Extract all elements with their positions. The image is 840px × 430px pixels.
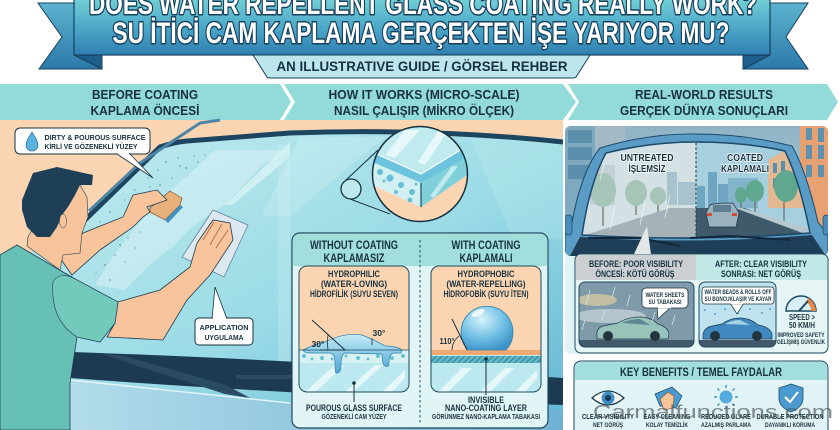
icon: cleaning hand [655, 387, 682, 410]
box: hydrophobic: HİDROFOBİK (SUYU İTEN) [444, 289, 529, 299]
icon: shield [779, 384, 803, 412]
image: car with water beading [699, 282, 776, 347]
section header: real-world results: REAL-WORLD RESULTS [635, 87, 773, 102]
callout: application [195, 287, 253, 345]
shirt [0, 245, 118, 430]
cowl and wiper [70, 352, 563, 405]
section header: how it works: NASIL ÇALIŞIR (MİKRO ÖLÇEK) [334, 103, 514, 118]
benefit: clear visibility: CLEAR VISIBILITY [582, 412, 634, 421]
city: coated side [697, 172, 758, 208]
heading: with coating: KAPLAMALI [460, 253, 512, 265]
benefit: durable protection: DAYANIKLI KORUMA [765, 422, 815, 429]
panel: real-world results [565, 126, 829, 354]
section header: before coating: BEFORE COATING [92, 87, 198, 102]
section header: how it works: HOW IT WORKS (MICRO-SCALE) [328, 87, 520, 102]
section header: before coating [0, 84, 291, 120]
water bead [461, 306, 513, 350]
text: before [589, 259, 683, 280]
windshield outline [582, 142, 810, 238]
comparison header band [293, 234, 547, 266]
A-pillar and top frame [85, 132, 563, 220]
text: speed and safety: SPEED > [789, 313, 815, 322]
label: coated [721, 153, 769, 175]
box: hydrophobic: HYDROPHOBIC [458, 269, 515, 280]
wall background [0, 120, 563, 430]
bubble: water sheets [642, 288, 688, 319]
before and after panel [574, 226, 828, 353]
scene: street through windshield [565, 126, 829, 256]
box: hydrophilic: (WATER-LOVING) [321, 279, 387, 290]
text: speed and safety: IMPROVED SAFETY [778, 332, 825, 339]
panel: windshield scene [0, 120, 563, 430]
porous layer [370, 161, 421, 207]
watermark: Carmalfunctions.com [593, 402, 833, 422]
label: nano-coating layer: GÖRÜNMEZ NANO-KAPLAMA TABAKASI [432, 412, 540, 421]
box: hydrophilic: HİDROFİLİK (SUYU SEVEN) [310, 289, 398, 299]
water film with drips [303, 334, 402, 373]
box: hydrophobic [431, 266, 541, 392]
top glass face [378, 127, 460, 174]
ear [60, 214, 66, 228]
bubble: water sheets: SU TABAKASI [648, 299, 682, 306]
section header: before coating: KAPLAMA ÖNCESİ [90, 103, 200, 118]
benefit: clear visibility [582, 412, 634, 429]
benefit: clear visibility: NET GÖRÜŞ [593, 420, 624, 429]
icon: speedometer [786, 296, 816, 311]
ribbon tail: right [743, 3, 808, 69]
label: coated: COATED [727, 153, 763, 164]
image: car in heavy rain [574, 282, 694, 347]
subtitle tab [253, 55, 590, 78]
trees [602, 202, 785, 226]
label: coated: KAPLAMALI [721, 164, 769, 175]
dirty speckles [95, 154, 206, 281]
text: speed and safety [777, 313, 825, 346]
box: hydrophobic: (WATER-REPELLING) [446, 279, 526, 290]
callout: application: UYGULAMA [204, 333, 244, 342]
bubble: water beads: WATER BEADS & ROLLS OFF [704, 290, 772, 296]
callout: application: APPLICATION [200, 323, 248, 332]
section header: how it works [284, 84, 576, 120]
callout: dirty surface: DIRTY & POUROUS SURFACE [44, 133, 146, 142]
bubble: water sheets: WATER SHEETS [646, 292, 685, 299]
bubble: water beads [702, 287, 774, 314]
contact angle [452, 319, 467, 350]
label: porous glass surface: GÖZENEKLİ CAM YÜZEY [322, 412, 387, 421]
panel: coating comparison [292, 233, 548, 428]
text: after: SONRASI: NET GÖRÜŞ [721, 269, 801, 280]
right teal face [422, 158, 467, 206]
upper arm and hand with sponge [60, 190, 183, 275]
benefit: reduced glare [701, 412, 751, 429]
benefit: easy cleaning: KOLAY TEMİZLİK [646, 421, 688, 429]
label: nano-coating layer: INVISIBLE [468, 395, 504, 406]
heading: with coating [452, 240, 521, 265]
rear car [706, 203, 739, 227]
benefit: easy cleaning [644, 412, 691, 429]
icon: eye [592, 391, 624, 405]
label: untreated: UNTREATED [620, 153, 674, 164]
text: before: ÖNCESİ: KÖTÜ GÖRÜŞ [596, 269, 674, 280]
text: after: AFTER: CLEAR VISIBILITY [715, 259, 807, 270]
glass [0, 132, 563, 430]
label: nano-coating layer [432, 357, 540, 421]
face [27, 180, 88, 270]
city: untreated side [667, 172, 696, 205]
benefit: durable protection [756, 412, 824, 429]
heading: with coating: WITH COATING [452, 240, 521, 252]
contact angle [312, 320, 345, 350]
benefit: reduced glare: AZALMIŞ PARLAMA [701, 422, 751, 429]
label: porous glass surface [306, 381, 402, 421]
heading: key benefits: KEY BENEFITS / TEMEL FAYDALAR [620, 365, 782, 379]
box: hydrophilic: 30° [312, 340, 324, 349]
title banner [38, 0, 808, 69]
label: porous glass surface: POUROUS GLASS SURFACE [306, 403, 402, 414]
text: after [715, 259, 807, 280]
panel: key benefits [574, 361, 828, 430]
label: untreated: İŞLEMSİZ [628, 162, 666, 175]
results frame [565, 126, 828, 354]
text: before: BEFORE: POOR VISIBILITY [589, 259, 683, 270]
callout: dirty surface: KİRLİ VE GÖZENEKLİ YÜZEY [44, 142, 138, 151]
car body [565, 134, 828, 256]
text: speed and safety: 50 KM/H [789, 321, 815, 330]
benefit: easy cleaning: EASY CLEANING [644, 412, 691, 421]
magnifier: glass layers [341, 120, 470, 222]
box: hydrophilic: 30° [372, 329, 386, 338]
label: nano-coating layer: NANO-COATING LAYER [445, 403, 527, 414]
side mirrors [565, 215, 572, 235]
ribbon tail: left [38, 3, 102, 69]
dashboard and wipers [570, 235, 826, 256]
banner body [74, 0, 770, 55]
bubble: water beads: SU BONCUKLAŞIR VE KAYAR [704, 297, 772, 303]
man [0, 167, 248, 430]
windshield view [582, 142, 809, 238]
box: hydrophilic: HYDROPHILIC [328, 269, 380, 280]
coating band [374, 150, 464, 183]
white column behind results [563, 120, 840, 430]
road [587, 208, 696, 238]
right buildings [800, 126, 828, 236]
section header: real-world results: GERÇEK DÜNYA SONUÇLARI [620, 103, 788, 118]
section header: real-world results [568, 84, 838, 120]
box: hydrophobic: 110° [440, 337, 454, 346]
label: untreated [620, 153, 674, 175]
box: hydrophilic [299, 266, 409, 392]
lower arm and hand with cloth [107, 210, 248, 340]
heading: without coating: KAPLAMASIZ [324, 253, 384, 265]
heading: without coating [310, 240, 398, 265]
heading: without coating: WITHOUT COATING [310, 240, 398, 252]
callout: dirty surface [15, 128, 153, 178]
icon: sun [714, 385, 738, 409]
glass reflections [95, 150, 290, 290]
benefit: reduced glare: REDUCED GLARE [701, 412, 751, 421]
hair [22, 167, 93, 237]
left buildings [565, 126, 595, 218]
subtitle tab: AN ILLUSTRATIVE GUIDE / GÖRSEL REHBER [276, 58, 568, 74]
icon: water drop [26, 132, 38, 151]
